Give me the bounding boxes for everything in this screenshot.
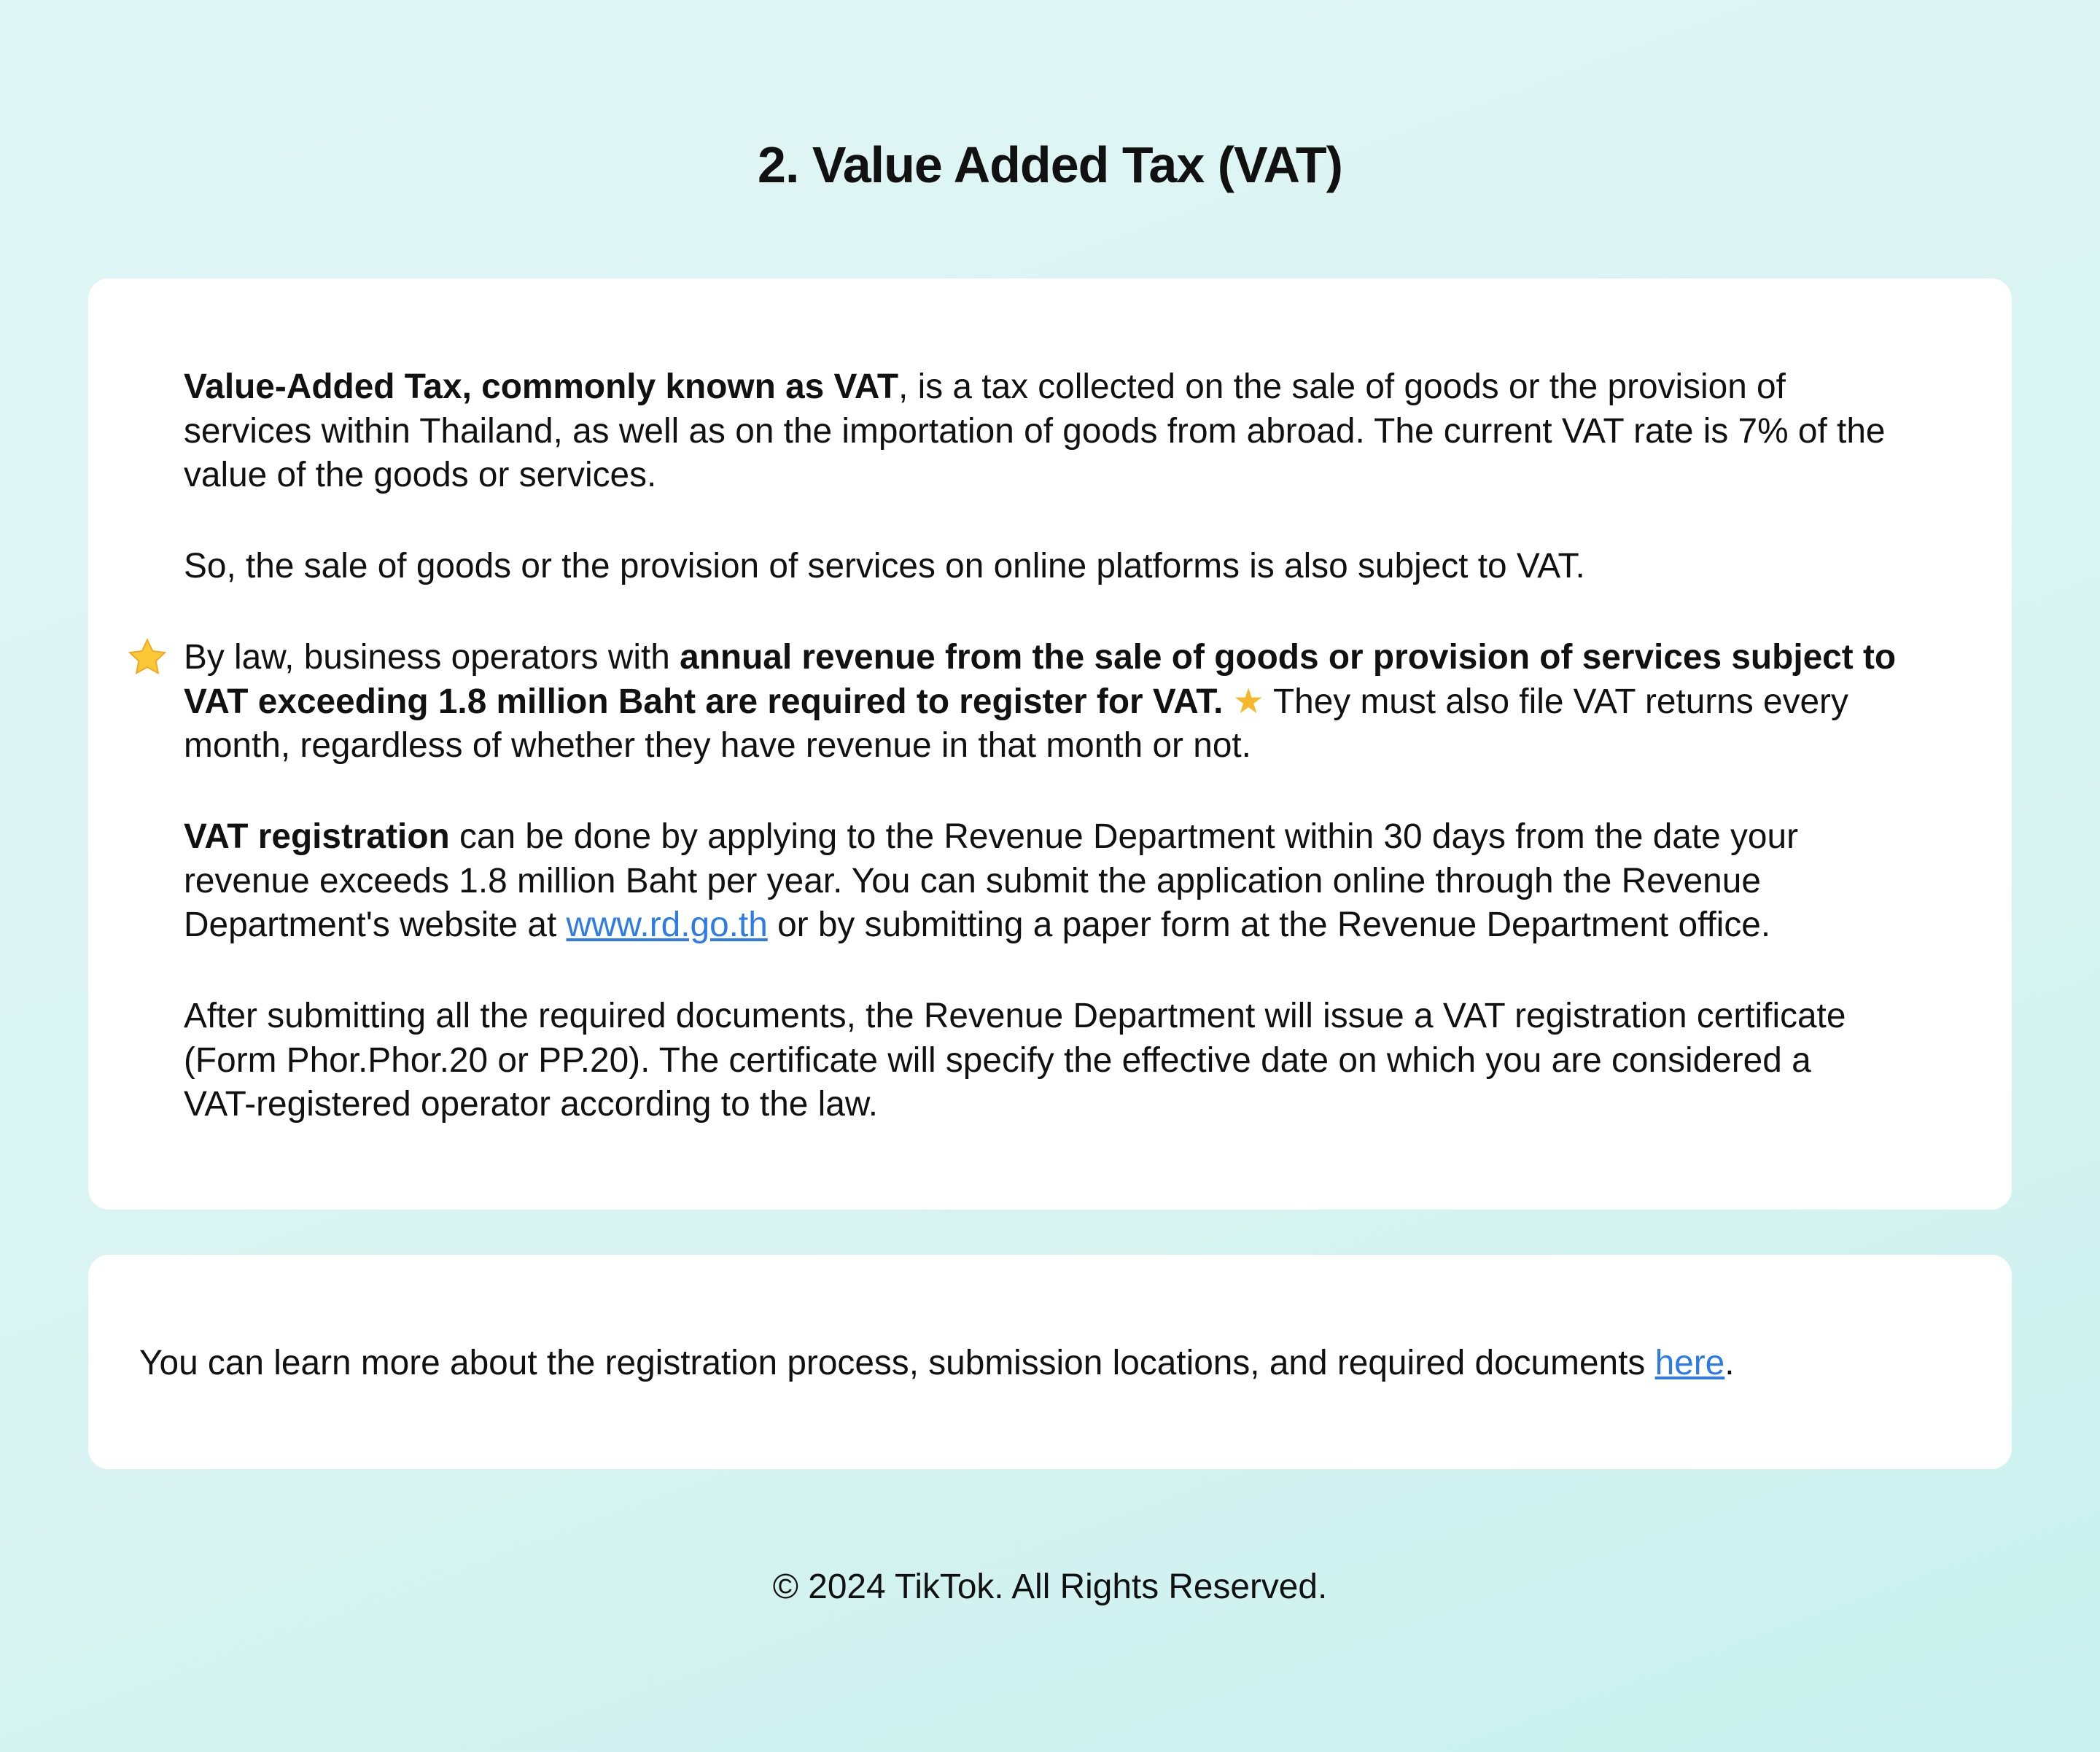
panel: VAT explanation xyxy=(88,279,2012,1210)
text: paragraph 2: So, the sale of goods or the provision of services on online platforms is also subject to VAT. xyxy=(184,547,1585,585)
panel: learn more xyxy=(88,1255,2012,1469)
text: paragraph 4 xyxy=(184,817,1798,944)
text: learn more: You can learn more about the registration process, submission locations, and required documents here. xyxy=(139,1344,1735,1382)
text: paragraph 5: (Form Phor.Phor.20 or PP.20). The certificate will specify the effective date on which you are considered a xyxy=(184,1041,1811,1080)
text: paragraph 5: After submitting all the required documents, the Revenue Department will issue a VAT registration certificate xyxy=(184,997,1846,1035)
footer: © 2024 TikTok. All Rights Reserved. xyxy=(773,1568,1327,1606)
text: paragraph 1: Value-Added Tax, commonly known as VAT, is a tax collected on the sale of goods or the provision of xyxy=(184,367,1786,406)
text: paragraph 4: Department's website at www.rd.go.th or by submitting a paper form at the Revenue Department office. xyxy=(184,906,1770,944)
text: paragraph 1: services within Thailand, as well as on the importation of goods from abroad. The current VAT rate is 7% of the xyxy=(184,412,1886,451)
text: paragraph 3: By law, business operators with annual revenue from the sale of goods or provision of services subject to xyxy=(184,638,1896,677)
text: paragraph 1 xyxy=(184,367,1886,494)
text: paragraph 5: VAT-registered operator according to the law. xyxy=(184,1085,878,1124)
text: paragraph 3: VAT exceeding 1.8 million Baht are required to register for VAT. ★ They must also file VAT returns every xyxy=(184,682,1848,721)
title: 2. Value Added Tax (VAT) xyxy=(758,136,1342,193)
text: paragraph 1: value of the goods or services. xyxy=(184,456,656,494)
text: paragraph 4: revenue exceeds 1.8 million Baht per year. You can submit the application online through the Revenue xyxy=(184,862,1761,900)
text: paragraph 4: VAT registration can be done by applying to the Revenue Department within 30 days from the date your xyxy=(184,817,1798,856)
icon: star xyxy=(128,638,166,674)
text: paragraph 5 xyxy=(184,997,1846,1124)
text: paragraph 3 xyxy=(184,638,1896,765)
text: paragraph 3: month, regardless of whether they have revenue in that month or not. xyxy=(184,726,1251,765)
